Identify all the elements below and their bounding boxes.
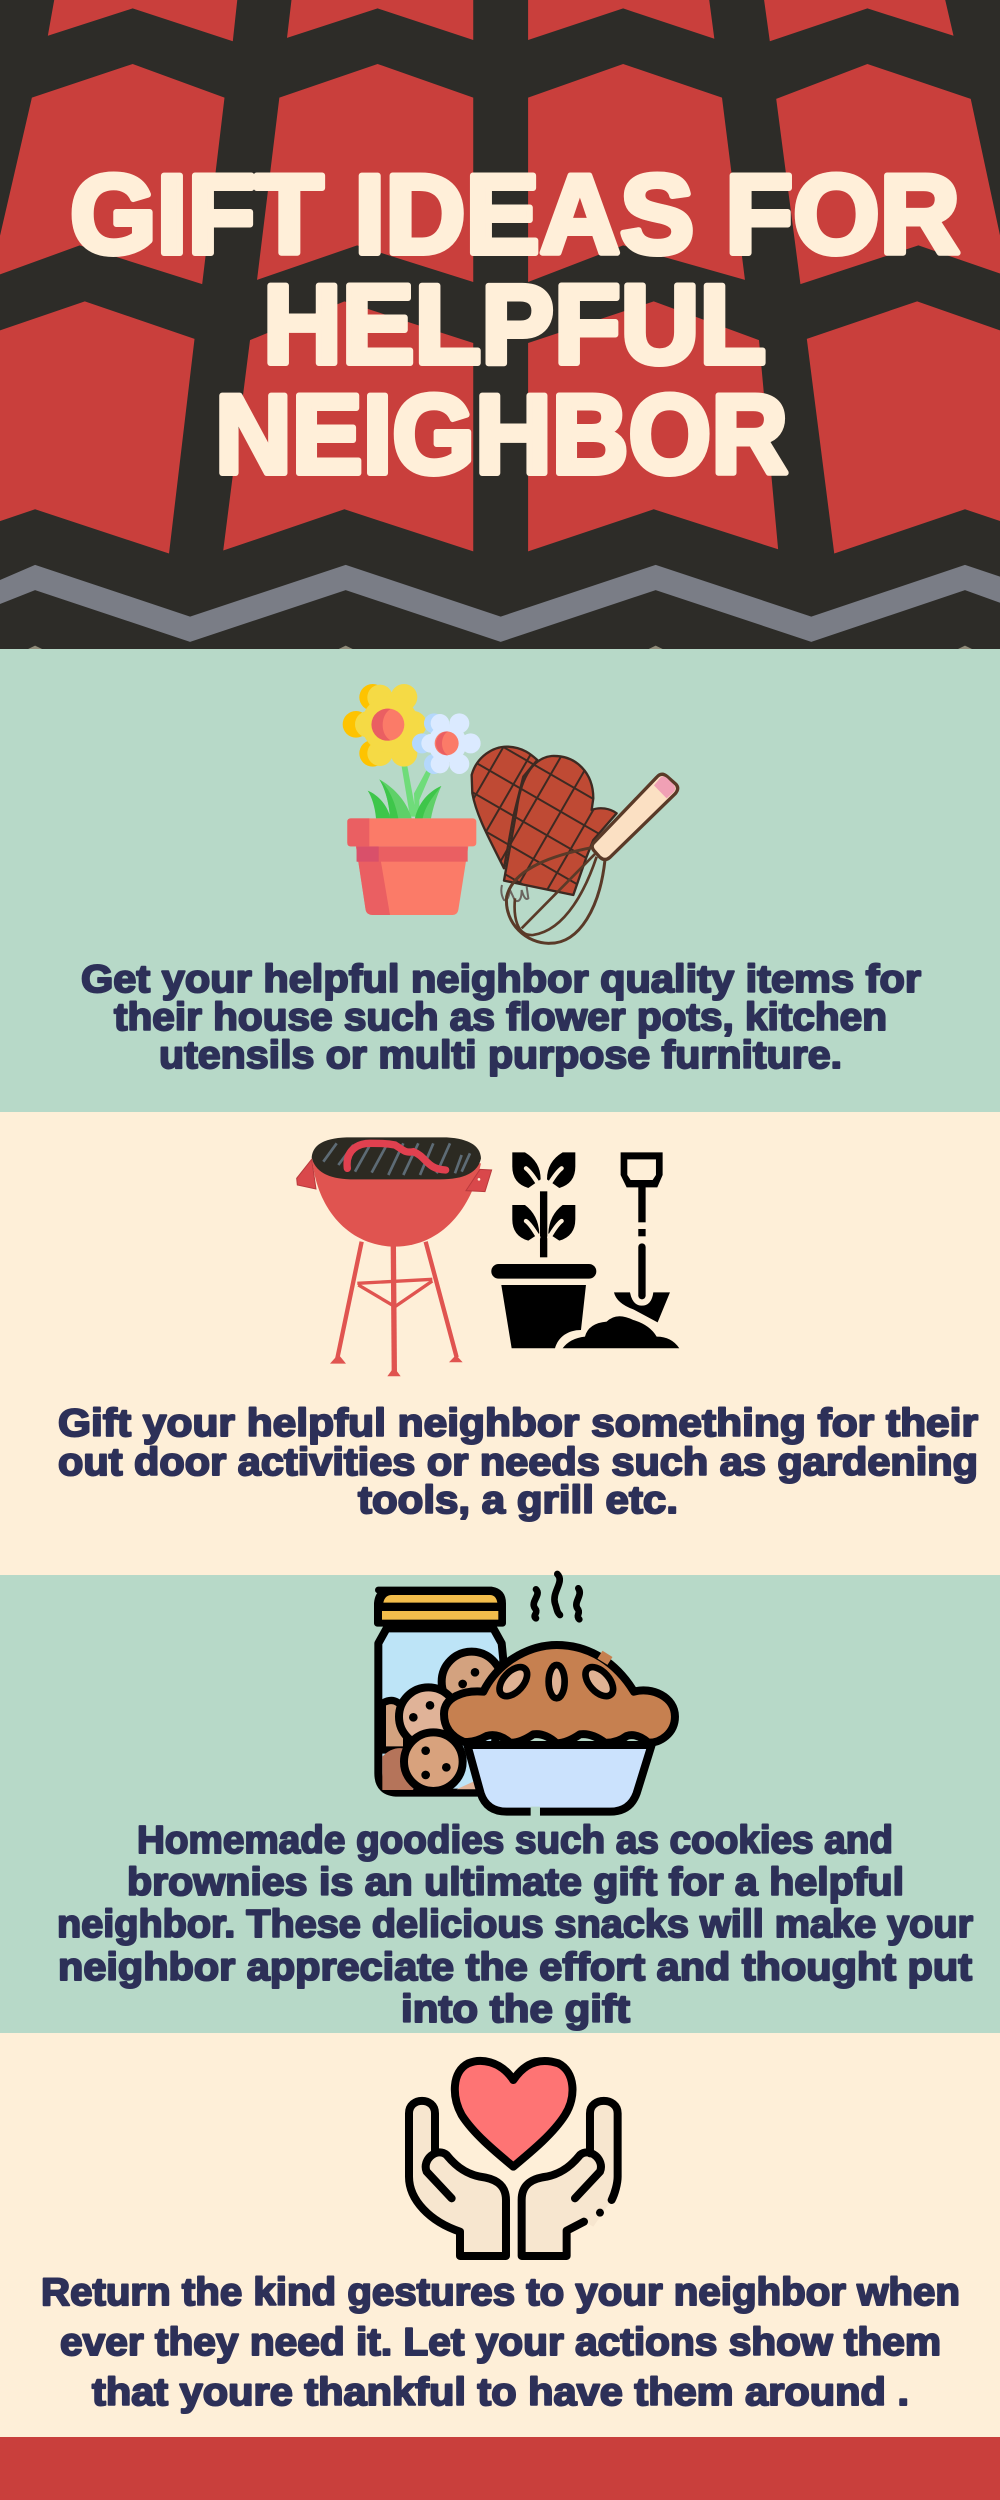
title: GIFT IDEAS FOR — [70, 152, 960, 277]
text: household gifts: Get your helpful neighbor quality items for — [81, 958, 921, 1001]
text: household gifts: their house such as flower pots, kitchen — [114, 996, 887, 1039]
text: return the kindness: that youre thankful to have them around . — [92, 2371, 909, 2414]
text: return the kindness: ever they need it. Let your actions show them — [60, 2321, 941, 2364]
icon: plant and shovel — [491, 1152, 679, 1348]
text: household gifts — [81, 958, 921, 1077]
text: return the kindness — [41, 2271, 960, 2414]
text: homemade goodies — [57, 1819, 973, 2031]
text: outdoor gifts: tools, a grill etc. — [358, 1479, 678, 1522]
text: outdoor gifts — [58, 1402, 978, 1522]
title — [70, 152, 960, 497]
panel: homemade goodies — [0, 1574, 1000, 2034]
text: household gifts: utensils or multi purpose furniture. — [159, 1034, 842, 1077]
icon: oven mitts and whisk — [472, 747, 678, 943]
text: outdoor gifts: out door activities or needs such as gardening — [58, 1441, 978, 1484]
icon: grill — [297, 1137, 492, 1376]
footer band — [0, 2437, 1000, 2500]
text: homemade goodies: brownies is an ultimate gift for a helpful — [127, 1861, 904, 1904]
text: homemade goodies: neighbor appreciate the effort and thought put — [58, 1946, 972, 1989]
header banner with roof pattern — [0, 0, 1000, 651]
text: homemade goodies: Homemade goodies such as cookies and — [137, 1819, 893, 1862]
text: outdoor gifts: Gift your helpful neighbor something for their — [58, 1402, 978, 1445]
panel: outdoor gifts — [0, 1112, 1000, 1576]
icon: flower pot — [343, 684, 481, 915]
icon: cookie jar and pie — [377, 1590, 675, 1817]
text: return the kindness: Return the kind gestures to your neighbor when — [41, 2271, 960, 2314]
title: NEIGHBOR — [215, 372, 788, 497]
icon: steam — [534, 1574, 580, 1619]
panel: household items — [0, 649, 1000, 1112]
text: homemade goodies: into the gift — [401, 1988, 630, 2031]
icon: heart in hands — [409, 2061, 618, 2256]
title: HELPFUL — [263, 262, 766, 387]
text: homemade goodies: neighbor. These delicious snacks will make your — [57, 1903, 973, 1946]
panel: return the kindness — [0, 2033, 1000, 2437]
